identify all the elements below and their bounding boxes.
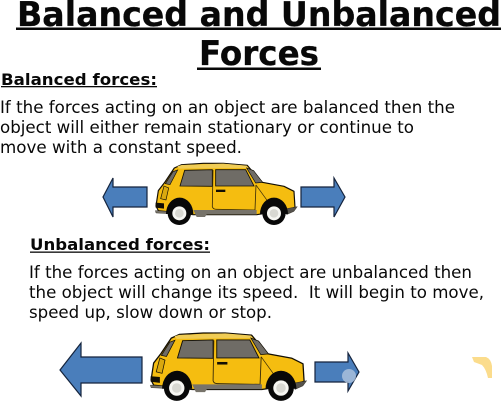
text block: balanced forces explanation [0, 98, 455, 158]
heading: unbalanced forces: Unbalanced forces: [30, 235, 210, 254]
arrow: large unbalanced left force [60, 343, 142, 396]
arrow: small unbalanced right force [315, 353, 359, 391]
decorative yellow mark [472, 357, 492, 378]
title [16, 0, 501, 74]
text block: unbalanced forces explanation: speed up, slow down or stop. [29, 303, 272, 323]
text block: balanced forces explanation: If the forces acting on an object are balanced then the [0, 98, 455, 118]
text block: unbalanced forces explanation [29, 263, 484, 323]
text block: unbalanced forces explanation: the object will change its speed. It will begin to move, [29, 283, 484, 303]
text block: unbalanced forces explanation: If the forces acting on an object are unbalanced then [29, 263, 472, 283]
text block: balanced forces explanation: move with a constant speed. [0, 138, 242, 158]
heading: balanced forces: Balanced forces: [1, 70, 157, 89]
icon: yellow car, balanced [155, 163, 297, 225]
text block: balanced forces explanation: object will either remain stationary or continue to [0, 118, 414, 138]
icon: yellow car, unbalanced [150, 333, 307, 401]
title: Forces [199, 34, 319, 74]
arrow: balanced left force [103, 178, 147, 217]
arrow: balanced right force [301, 178, 345, 217]
